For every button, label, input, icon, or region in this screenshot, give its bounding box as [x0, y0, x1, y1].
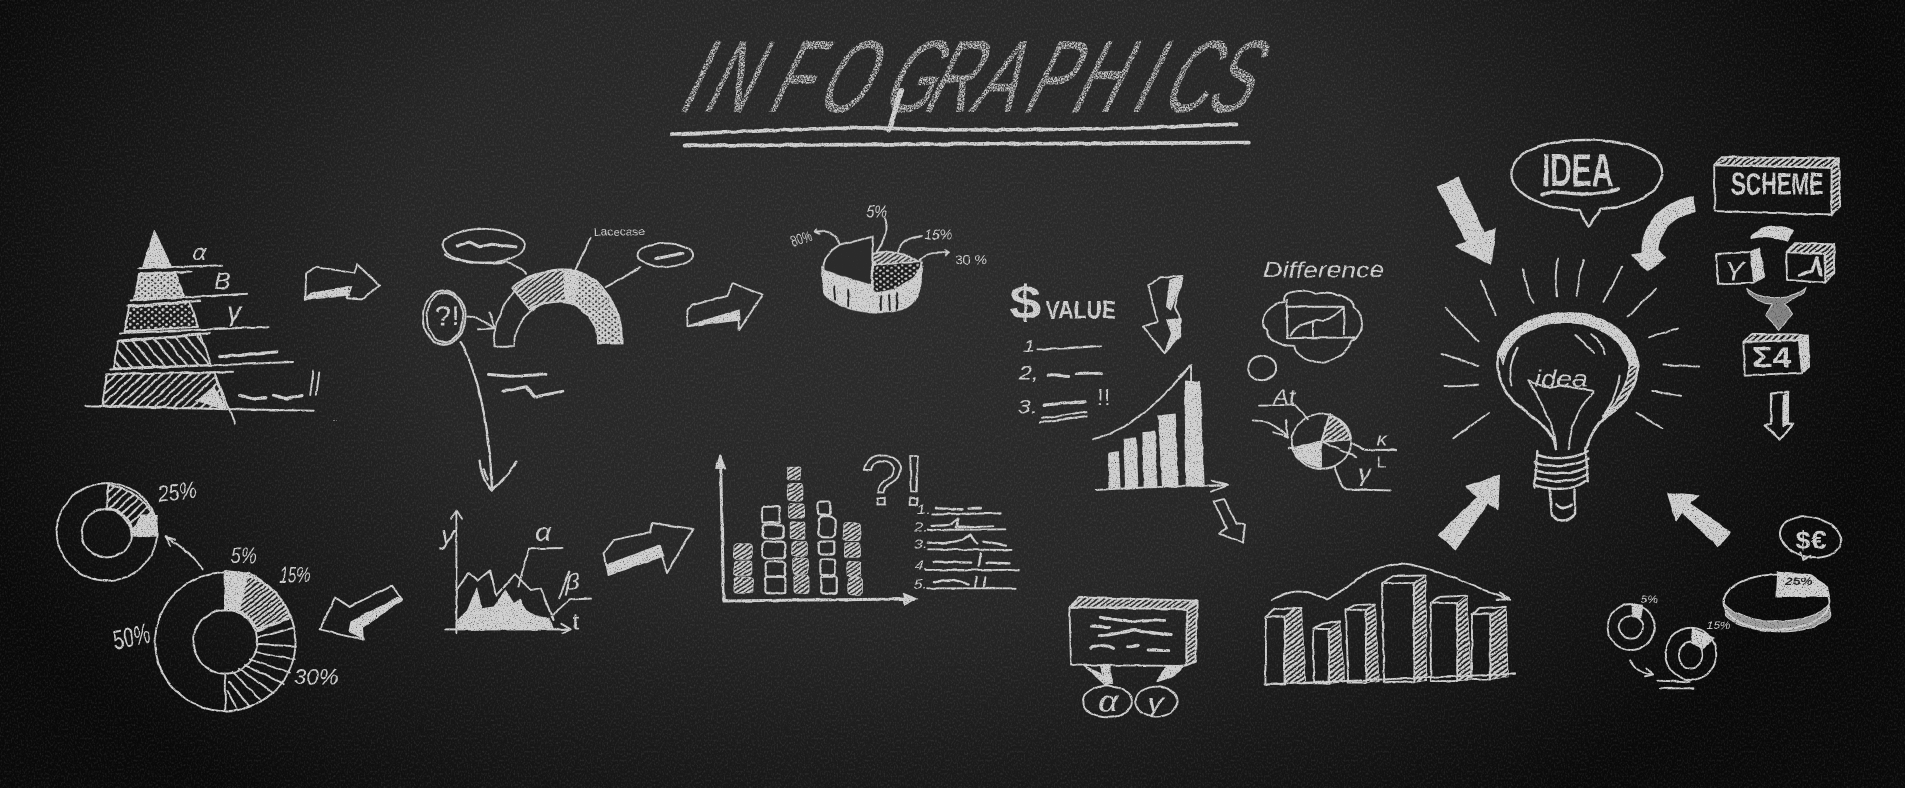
bubble labels — [1098, 685, 1165, 718]
small pie labels — [1271, 385, 1389, 487]
idea speech bubble: IDEA — [1542, 144, 1613, 196]
bottom right small donuts: 5% — [1641, 594, 1658, 606]
3D bar chart with trend curve — [1265, 564, 1516, 684]
speech bubble with alpha and gamma — [1069, 597, 1197, 718]
small down arrow — [1214, 499, 1245, 543]
bottom right 3D pie — [1707, 572, 1830, 632]
3D pie chart — [787, 202, 987, 313]
stacked block chart — [715, 455, 918, 605]
question mark label: ?! — [434, 301, 460, 332]
numbered list: 5. — [913, 578, 927, 592]
currency bubble: $€ — [1796, 526, 1826, 554]
pie labels: 80% — [787, 228, 815, 250]
donut labels: 50% — [109, 617, 153, 656]
small pie labels: At — [1271, 385, 1297, 409]
arrow: area chart to big donut — [320, 586, 402, 640]
bulb rays — [1441, 259, 1699, 438]
value down arrow — [1143, 276, 1183, 353]
donut labels: 5% — [231, 543, 256, 568]
pyramid labels: B — [214, 269, 231, 295]
pyramid labels: γ — [227, 297, 244, 326]
arrow: pyramid to gauge — [305, 264, 380, 299]
area chart labels: t — [572, 610, 580, 635]
thought cloud with line chart — [1248, 291, 1362, 380]
small pie labels: γ — [1358, 461, 1373, 487]
pie labels: 5% — [867, 202, 887, 222]
value list: VALUE — [1046, 296, 1116, 324]
value list: !! — [1097, 383, 1110, 410]
numbered list: 1. — [917, 503, 930, 518]
numbered list: 2. — [913, 521, 928, 535]
small pie labels: L — [1377, 454, 1386, 471]
pie labels — [787, 202, 987, 268]
pie labels: 30 % — [955, 253, 987, 268]
donut labels: 15% — [279, 562, 310, 587]
bubble labels: α — [1098, 685, 1120, 718]
bottom right 3D pie: 25% — [1784, 575, 1813, 588]
small pie with labels — [1253, 385, 1396, 490]
area chart labels: α — [536, 518, 552, 547]
label 25%: 25% — [155, 477, 198, 508]
pyramid labels: .. — [333, 414, 338, 423]
area chart labels: β — [564, 570, 580, 596]
area chart labels — [439, 518, 580, 635]
question and exclamation marks: ?! — [861, 441, 925, 520]
arrow: gauge to pie — [687, 283, 762, 330]
pyramid chart — [85, 230, 338, 423]
pyramid labels: α — [193, 240, 207, 265]
scheme box — [1714, 157, 1840, 215]
small donut 25% — [57, 477, 203, 581]
pie labels: 15% — [925, 227, 952, 243]
value list: 2, — [1018, 361, 1039, 384]
currency bubble — [1775, 511, 1846, 564]
pyramid labels — [193, 240, 338, 423]
big solid arrow top-left — [1437, 177, 1496, 265]
right gauge callout — [638, 243, 693, 267]
difference heading: Difference — [1263, 258, 1384, 282]
bubble labels: γ — [1147, 689, 1165, 718]
idea speech bubble — [1511, 140, 1662, 226]
value list: 1 — [1023, 337, 1035, 356]
rising bar chart — [1093, 365, 1228, 492]
numbered list — [913, 503, 1019, 592]
callout label: Lacecase — [594, 226, 645, 238]
title underlines and G tail — [672, 90, 1248, 146]
scheme flow diagram: Σ4 — [1752, 340, 1791, 373]
bottom right 3D pie: 15% — [1707, 620, 1730, 632]
gauge arc chart with callouts — [423, 226, 645, 397]
light bulb — [1441, 259, 1699, 520]
value list: 3. — [1018, 395, 1037, 418]
area line chart — [439, 511, 591, 635]
numbered list: 3. — [913, 538, 927, 552]
bulb filament word: idea — [1535, 366, 1588, 393]
donut labels: 30% — [294, 664, 339, 689]
scheme flow diagram: Y — [1724, 257, 1747, 287]
big curved arrow top-right — [1632, 197, 1695, 271]
bulb socket — [1535, 449, 1589, 520]
long curved arrow — [460, 342, 516, 491]
numbered list: 4. — [914, 559, 928, 573]
bottom right small donuts — [1608, 594, 1716, 688]
big solid arrow bottom-right — [1667, 493, 1731, 547]
big donut chart — [109, 543, 339, 711]
value list: $ — [1009, 276, 1041, 329]
title: INFOGRAPHICS — [664, 19, 1290, 134]
small pie labels: κ — [1377, 427, 1389, 451]
donut labels — [109, 543, 339, 689]
arrow: area chart to bar chart — [604, 523, 693, 575]
value list — [1009, 276, 1116, 423]
big solid arrow bottom-left — [1438, 475, 1500, 549]
area chart labels: y — [439, 521, 456, 550]
scheme flow diagram — [1716, 226, 1835, 440]
scheme box: SCHEME — [1731, 167, 1824, 202]
